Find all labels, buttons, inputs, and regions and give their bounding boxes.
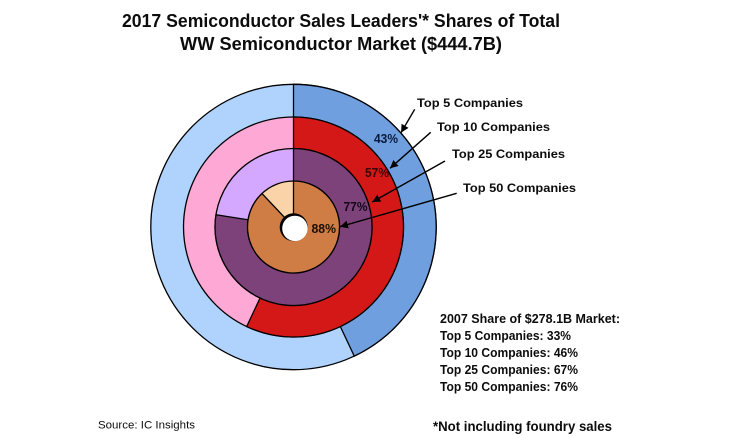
2007 share text block [440, 312, 620, 394]
title: WW Semiconductor Market ($444.7B) [180, 34, 502, 54]
title [122, 11, 560, 54]
nested donut chart [151, 84, 436, 370]
percentage labels: 77% [344, 200, 368, 214]
arrow labels: Top 5 Companies [417, 96, 523, 110]
percentage labels [312, 132, 398, 236]
2007 share text block: Top 25 Companies: 67% [440, 363, 578, 377]
ring: top 10 companies 57% [184, 117, 404, 337]
ring: top 5 companies 43% [151, 84, 436, 370]
arrow labels: Top 50 Companies [463, 181, 576, 195]
arrows [340, 109, 457, 227]
percentage labels: 57% [365, 166, 389, 180]
percentage labels: 43% [374, 132, 398, 146]
ring: top 50 companies 88% [248, 181, 340, 273]
percentage labels: 88% [312, 222, 336, 236]
source note: Source: IC Insights [98, 420, 196, 432]
arrow labels [417, 96, 576, 195]
arrow labels: Top 10 Companies [437, 120, 550, 134]
2007 share text block: 2007 Share of $278.1B Market: [440, 312, 620, 326]
footnote: *Not including foundry sales [433, 418, 612, 434]
arrow labels: Top 25 Companies [452, 147, 565, 161]
title: 2017 Semiconductor Sales Leaders'* Shares of Total [122, 11, 560, 31]
ring: top 25 companies 77% [215, 148, 372, 306]
center hole [280, 213, 308, 241]
2007 share text block: Top 50 Companies: 76% [440, 380, 578, 394]
2007 share text block: Top 10 Companies: 46% [440, 346, 578, 360]
2007 share text block: Top 5 Companies: 33% [440, 329, 571, 343]
